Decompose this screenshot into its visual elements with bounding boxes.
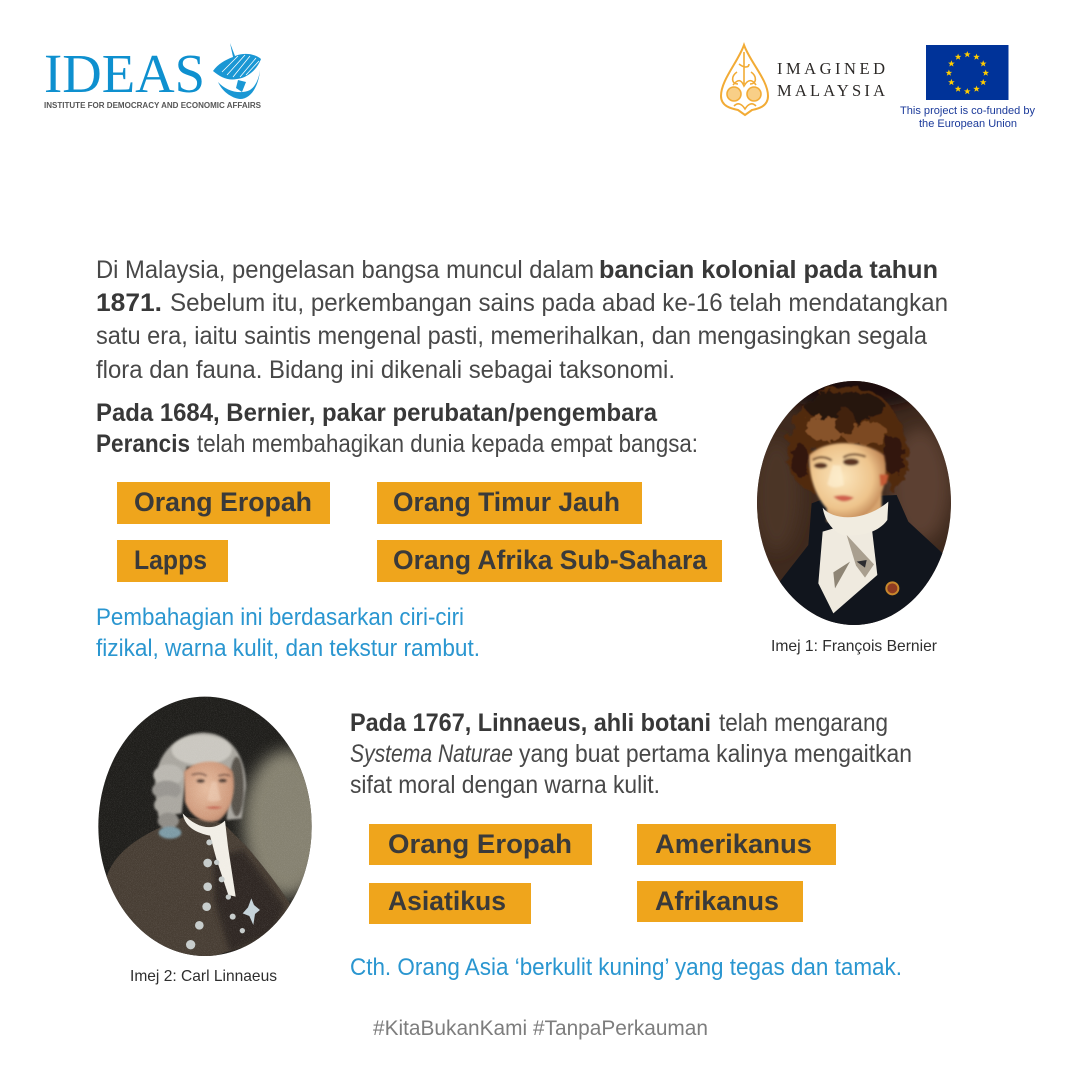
Linnaeus note: Cth. Orang Asia ‘berkulit kuning’ yang tegas dan tamak. bbox=[350, 954, 902, 981]
tag: Amerikanus: Amerikanus bbox=[655, 829, 812, 859]
Linnaeus statement: sifat moral dengan warna kulit. bbox=[350, 771, 660, 799]
neck and face bbox=[809, 443, 889, 522]
intro paragraph: Sebelum itu, perkembangan sains pada abad ke-16 telah mendatangkan bbox=[170, 289, 948, 317]
tag: Orang Timur Jauh bbox=[377, 482, 642, 524]
tag: Lapps: Lapps bbox=[134, 545, 207, 575]
tag: Afrikanus: Afrikanus bbox=[655, 886, 779, 916]
cravat bbox=[183, 813, 236, 897]
tag: Orang Timur Jauh: Orang Timur Jauh bbox=[393, 487, 620, 517]
hair bbox=[787, 387, 909, 492]
order star bbox=[243, 898, 260, 925]
tag: Lapps bbox=[117, 540, 228, 582]
EU credit line 1: This project is co-funded by bbox=[900, 105, 1036, 117]
Linnaeus statement bbox=[350, 709, 912, 799]
wordmark line 1: IMAGINED bbox=[777, 59, 885, 78]
intro paragraph bbox=[96, 256, 948, 384]
tag: Amerikanus bbox=[637, 824, 836, 865]
hashtags: #KitaBukanKami #TanpaPerkauman bbox=[373, 1016, 708, 1040]
Imagined Malaysia logo bbox=[721, 45, 885, 115]
Linnaeus categories bbox=[369, 824, 836, 924]
Linnaeus statement: yang buat pertama kalinya mengaitkan bbox=[519, 740, 912, 768]
tag: Afrikanus bbox=[637, 881, 803, 922]
Bernier statement: Perancis bbox=[96, 430, 190, 458]
caption: Imej 1: Imej 1: François Bernier bbox=[771, 638, 938, 655]
icon: IDEAS bird bbox=[213, 43, 261, 99]
icon: gold wayang leaf bbox=[721, 45, 768, 115]
intro paragraph: flora dan fauna. Bidang ini dikenali sebagai taksonomi. bbox=[96, 356, 675, 384]
Linnaeus statement: telah mengarang bbox=[719, 709, 888, 737]
Bernier statement: Pada 1684, Bernier, pakar perubatan/pengembara bbox=[96, 399, 658, 427]
coat bbox=[105, 817, 292, 963]
Linnaeus statement: Systema Naturae bbox=[350, 740, 513, 768]
IDEAS wordmark: IDEAS bbox=[44, 43, 205, 104]
Bernier categories bbox=[117, 482, 722, 582]
medal bbox=[885, 581, 899, 595]
face bbox=[184, 762, 234, 822]
cravat bbox=[818, 502, 888, 613]
intro paragraph: Di Malaysia, pengelasan bangsa muncul dalam bbox=[96, 256, 594, 284]
intro paragraph: satu era, iaitu saintis mengenal pasti, memerihalkan, dan mengasingkan segala bbox=[96, 322, 927, 350]
caption: Imej 2: Imej 2: Carl Linnaeus bbox=[130, 968, 277, 985]
IDEAS logo bbox=[44, 43, 262, 110]
buttons bbox=[186, 839, 245, 949]
tag: Orang Eropah bbox=[117, 482, 330, 524]
Linnaeus statement: Pada 1767, Linnaeus, ahli botani bbox=[350, 709, 711, 737]
wordmark line 2: MALAYSIA bbox=[777, 81, 885, 100]
portrait: Carl Linnaeus bbox=[98, 696, 312, 956]
intro paragraph: bancian kolonial pada tahun bbox=[599, 256, 938, 284]
EU credit line 2: the European Union bbox=[919, 118, 1017, 130]
icon: EU flag bbox=[926, 45, 1008, 100]
EU flag and credit bbox=[900, 45, 1036, 130]
Bernier note: Pembahagian ini berdasarkan ciri-ciri bbox=[96, 604, 464, 631]
wig bbox=[152, 733, 246, 839]
tag: Orang Eropah: Orang Eropah bbox=[388, 829, 572, 859]
tag: Asiatikus: Asiatikus bbox=[388, 886, 506, 916]
tag: Asiatikus bbox=[369, 883, 531, 924]
portrait: François Bernier bbox=[757, 381, 951, 625]
tag: Orang Afrika Sub-Sahara bbox=[377, 540, 722, 582]
tag: Orang Eropah: Orang Eropah bbox=[134, 487, 312, 517]
tag: Orang Afrika Sub-Sahara: Orang Afrika Sub-Sahara bbox=[393, 545, 708, 575]
intro paragraph: 1871. bbox=[96, 289, 162, 317]
coat bbox=[780, 495, 942, 625]
IDEAS tagline: INSTITUTE FOR DEMOCRACY AND ECONOMIC AFFAIRS bbox=[44, 101, 262, 110]
Bernier statement: telah membahagikan dunia kepada empat bangsa: bbox=[197, 430, 698, 458]
Bernier statement bbox=[96, 399, 698, 458]
tag: Orang Eropah bbox=[369, 824, 592, 865]
Bernier note bbox=[96, 604, 480, 662]
Bernier note: fizikal, warna kulit, dan tekstur rambut. bbox=[96, 635, 480, 662]
